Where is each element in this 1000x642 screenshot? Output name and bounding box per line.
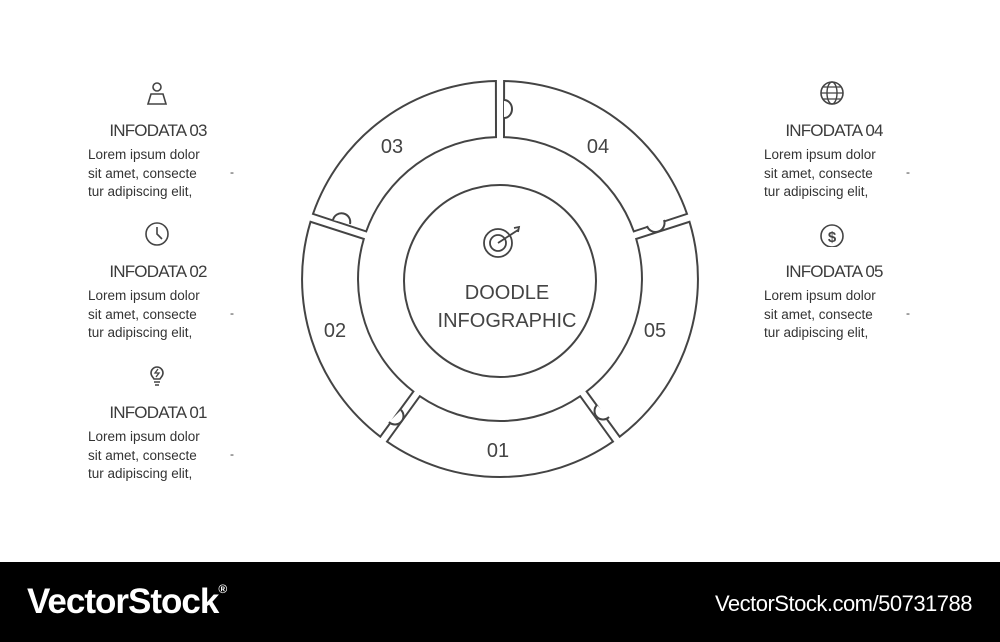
text	[88, 147, 200, 199]
left block 03: -	[230, 165, 234, 179]
footer logo: VectorStock®	[27, 582, 226, 621]
text: tur adipiscing elit,	[88, 184, 192, 199]
center title: INFOGRAPHIC	[438, 310, 576, 332]
text	[764, 288, 876, 340]
left block 01: -	[230, 447, 234, 461]
text: sit amet, consecte	[88, 306, 197, 322]
text: Lorem ipsum dolor	[764, 147, 876, 162]
segment 03	[313, 81, 496, 231]
footer url: VectorStock.com/50731788	[715, 591, 972, 616]
center title	[438, 282, 576, 332]
puzzle knobs	[333, 100, 665, 424]
text	[88, 288, 200, 340]
center title: DOODLE	[465, 282, 549, 304]
segment labels: 04	[587, 136, 609, 158]
text: tur adipiscing elit,	[764, 184, 868, 199]
text: tur adipiscing elit,	[764, 325, 868, 340]
title: INFODATA 01	[109, 403, 207, 422]
icon: target	[484, 227, 519, 257]
text: sit amet, consecte	[764, 166, 873, 180]
left block 01	[88, 366, 234, 481]
inner circle	[404, 185, 596, 377]
text: sit amet, consecte	[88, 166, 197, 180]
icon: globe	[820, 81, 844, 105]
text: Lorem ipsum dolor	[88, 147, 200, 162]
segment labels: 01	[487, 440, 509, 462]
segment 01	[387, 396, 613, 477]
left block 03	[88, 82, 234, 199]
text: tur adipiscing elit,	[88, 466, 192, 481]
left block 02	[88, 222, 234, 340]
text: Lorem ipsum dolor	[764, 288, 876, 303]
segment 04	[504, 81, 687, 231]
title: INFODATA 03	[109, 121, 207, 140]
text: sit amet, consecte	[88, 448, 197, 462]
segment 05	[587, 222, 698, 437]
left block 02: -	[230, 306, 234, 320]
icon: dollar: $	[828, 229, 837, 246]
footer band	[0, 562, 1000, 642]
right block 04	[764, 81, 910, 199]
segment labels: 03	[381, 136, 403, 158]
right block 05	[764, 224, 910, 340]
icon: dollar	[820, 224, 844, 247]
text	[88, 429, 200, 481]
segment labels	[324, 136, 666, 462]
title: INFODATA 02	[109, 262, 207, 281]
right block 05: -	[906, 306, 910, 320]
text: Lorem ipsum dolor	[88, 288, 200, 303]
title: INFODATA 04	[785, 121, 883, 140]
text: sit amet, consecte	[764, 306, 873, 322]
segment labels: 02	[324, 320, 346, 342]
segment 02	[302, 222, 413, 437]
text: Lorem ipsum dolor	[88, 429, 200, 444]
title: INFODATA 05	[785, 262, 883, 281]
right block 04: -	[906, 165, 910, 179]
text: tur adipiscing elit,	[88, 325, 192, 340]
icon: bulb	[150, 366, 164, 386]
text	[764, 147, 876, 199]
icon: clock	[145, 222, 169, 246]
segment labels: 05	[644, 320, 666, 342]
icon: person	[147, 82, 167, 105]
